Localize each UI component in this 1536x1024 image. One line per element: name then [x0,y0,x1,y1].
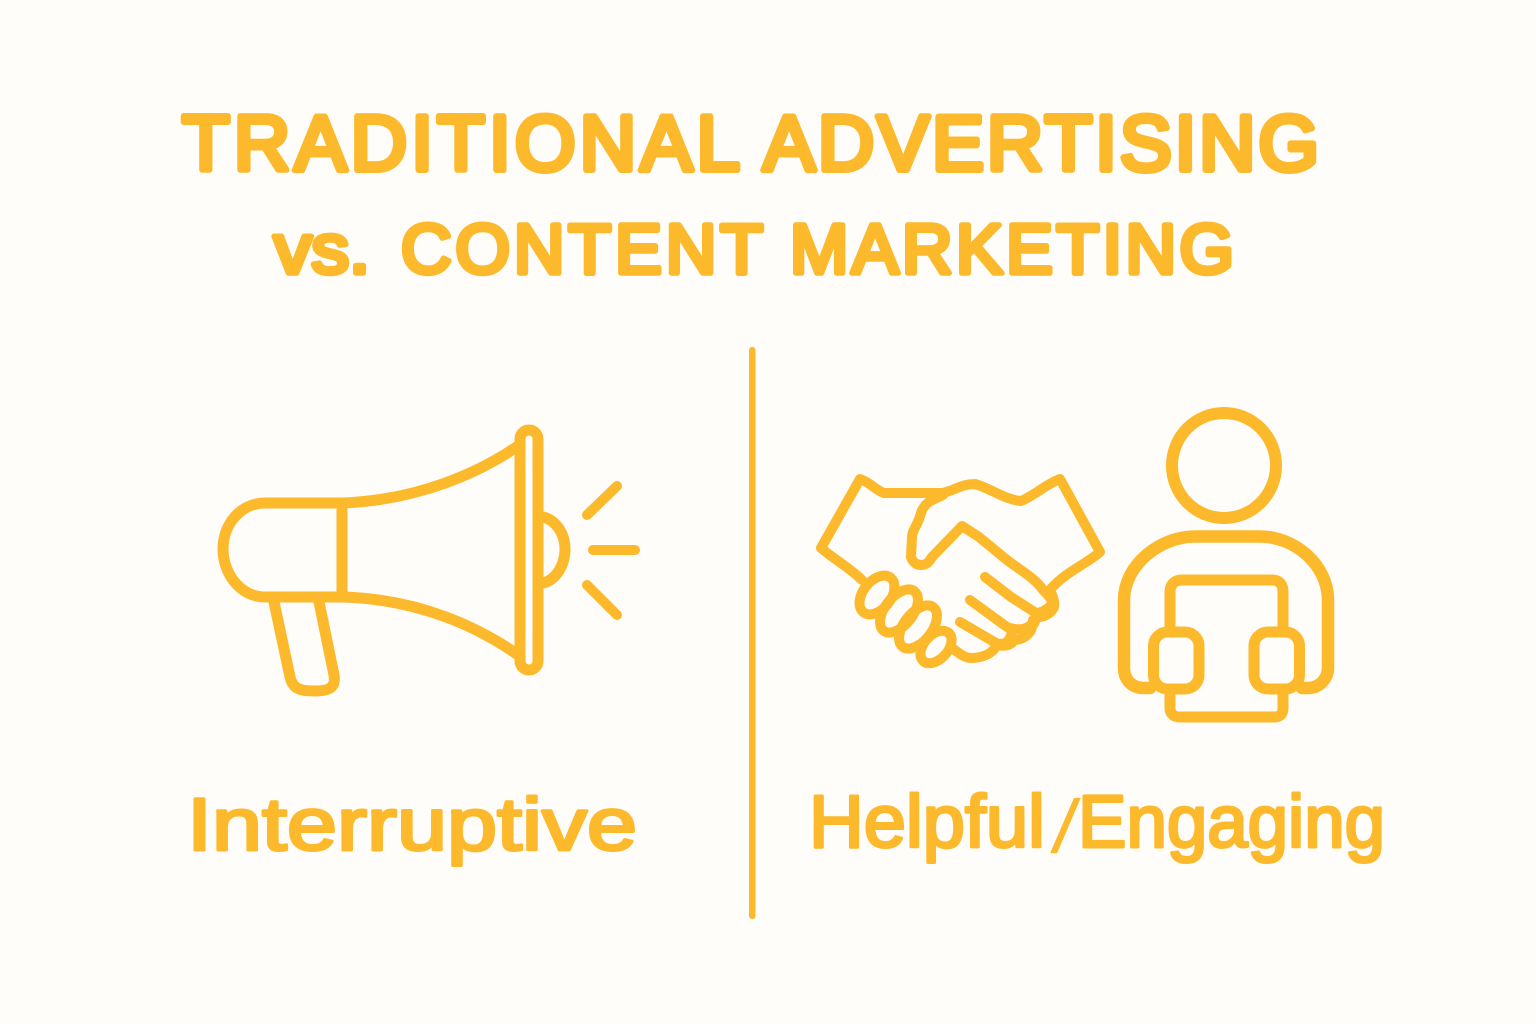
title line 2: content: CONTENT [401,210,763,288]
label: interruptive: Interruptive [187,783,637,866]
title line 2: marketing: MARKETING [790,210,1234,288]
title line 2: vs.: vs. [274,210,370,288]
left hand [1154,632,1199,689]
shoulders [1124,536,1328,688]
icon: person with tablet [1124,413,1328,717]
right hand [1254,632,1300,689]
title [182,99,1319,288]
label: helpful/engaging: Engaging [1078,780,1385,863]
icon: handshake [821,479,1100,669]
label: helpful/engaging [809,780,1385,868]
head [1172,413,1276,518]
label: helpful/engaging: Helpful [809,780,1045,863]
icon: megaphone [223,430,635,691]
icon: sound rays [587,486,635,615]
title line 1: traditional: TRADITIONAL [182,99,740,187]
title line 1: advertising: ADVERTISING [763,99,1319,187]
tablet [1170,580,1283,717]
vertical divider [749,347,756,919]
fingers [852,569,958,669]
label: helpful/engaging: / [1048,785,1082,868]
